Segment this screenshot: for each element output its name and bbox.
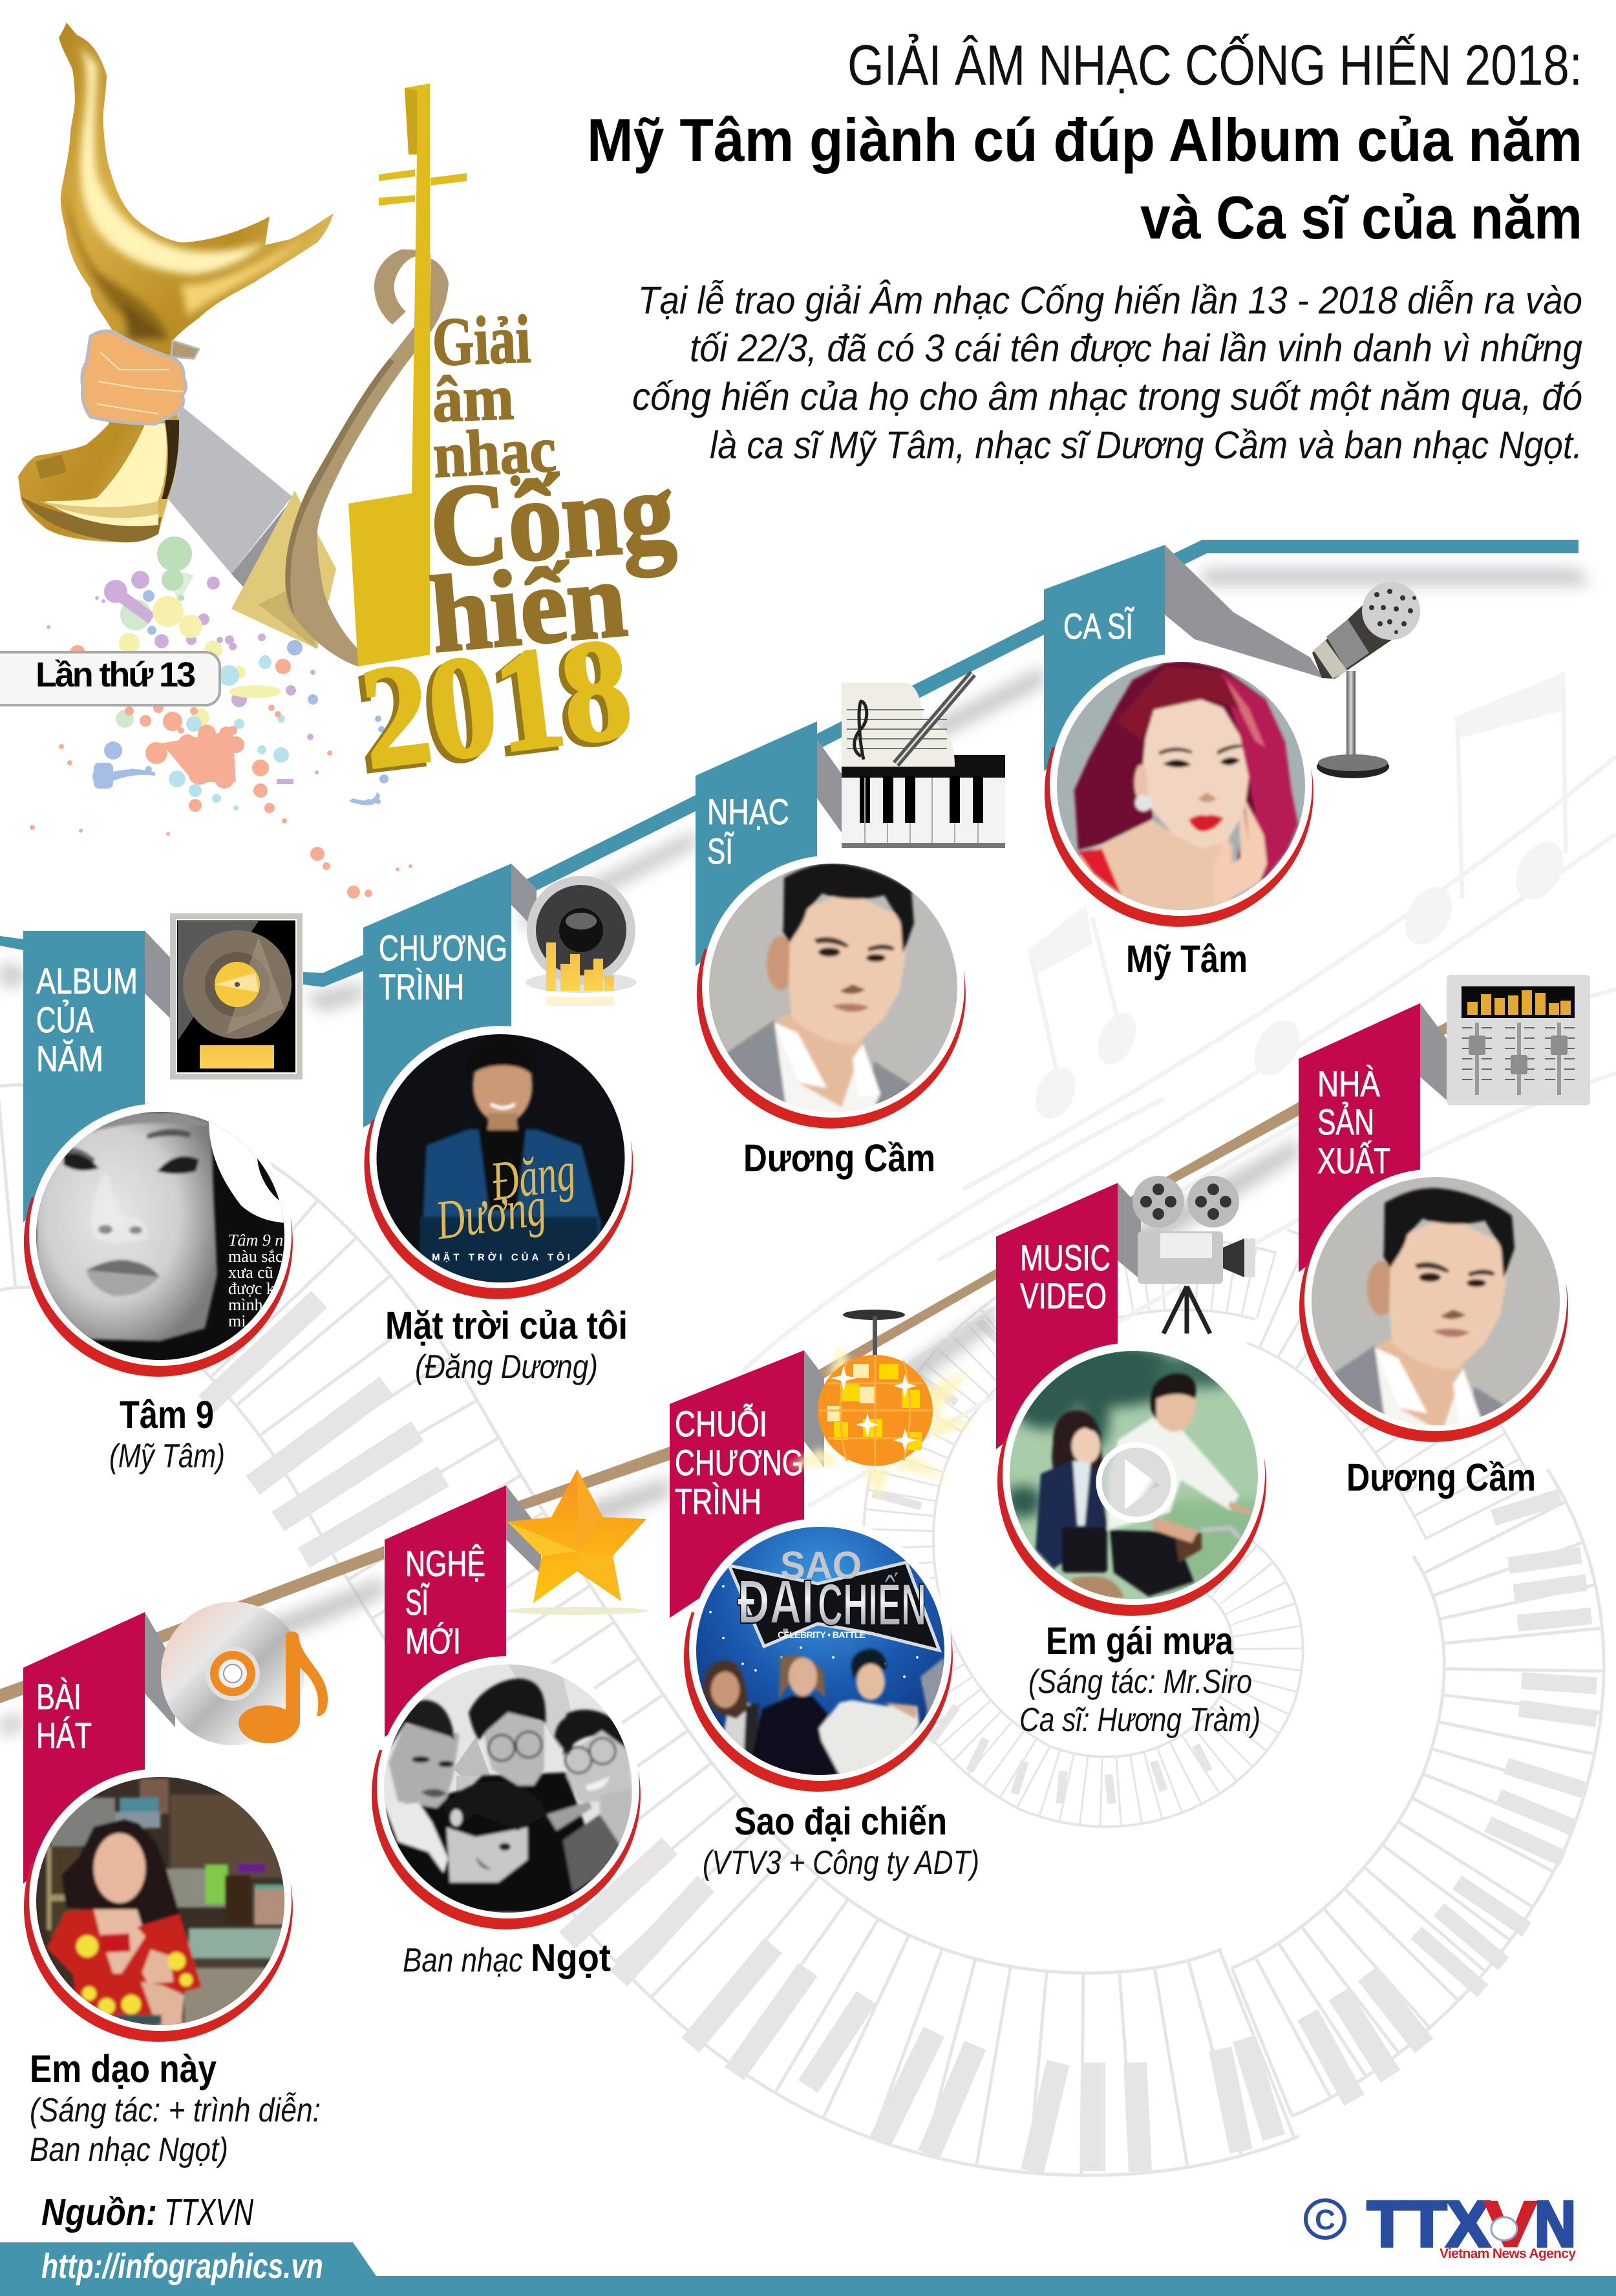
icon: golden bird trophy <box>18 23 334 542</box>
photo: Tâm 9 album: xưa cũ <box>228 1263 273 1282</box>
logo text: 2018 <box>353 606 639 800</box>
label: Mỹ Tâm: Mỹ Tâm <box>1126 937 1248 981</box>
photo: Sao đại chiến poster: CHIẾN <box>818 1571 926 1638</box>
logo text: âm <box>431 361 515 436</box>
flag: Nhà sản xuất <box>1299 1003 1420 1272</box>
photo: Mặt trời của tôi album <box>364 1026 633 1299</box>
flag: Chuỗi chương trình: TRÌNH <box>675 1481 761 1522</box>
label: Mặt trời của tôi: Mặt trời của tôi <box>385 1304 628 1347</box>
source <box>41 2191 253 2233</box>
flag: Nhạc sĩ: NHẠC <box>707 791 789 832</box>
intro paragraph: cống hiến của họ cho âm nhạc trong suốt một năm qua, đó <box>632 375 1582 418</box>
photo: Tâm 9 album: màu sắc <box>228 1247 282 1266</box>
flag: Music video: VIDEO <box>1020 1275 1107 1316</box>
label: Tâm 9 <box>109 1393 225 1475</box>
copyright symbol <box>1306 2200 1345 2238</box>
logo text <box>348 301 679 803</box>
photo: Tâm 9 album: Tâm 9 n <box>228 1231 283 1249</box>
photo: Sao đại chiến poster: SAO <box>780 1544 862 1587</box>
icon: instrument body <box>231 83 467 666</box>
icon: piano with sheet music and pen <box>842 674 1005 848</box>
flag: Bài hát <box>23 1612 145 1884</box>
tan ribbon line <box>0 1021 1448 1703</box>
flag: Nghệ sĩ mới: SĨ <box>405 1582 430 1622</box>
photo: Mặt trời của tôi album: Dương <box>432 1175 549 1251</box>
flag: Nhà sản xuất: NHÀ <box>1317 1063 1381 1104</box>
label: Dương Cầm: Dương Cầm <box>743 1136 935 1180</box>
label: Tâm 9: (Mỹ Tâm) <box>109 1438 225 1475</box>
photo: Tâm 9 album: được k <box>228 1279 275 1298</box>
logo: TTXVN: V <box>1484 2188 1537 2260</box>
ribbon shadows <box>0 569 1590 1736</box>
flag: Ca sĩ <box>1044 545 1165 771</box>
title <box>587 33 1582 251</box>
flag: Chương trình: TRÌNH <box>379 966 464 1007</box>
footer bar with URL: http://infographics.vn <box>41 2247 323 2286</box>
flag: Album của năm: CỦA <box>36 999 94 1040</box>
logo: TTXVN: N <box>1535 2188 1576 2260</box>
flag: Bài hát: BÀI <box>36 1676 81 1717</box>
icon: disco ball <box>785 1310 976 1500</box>
source: Nguồn: <box>41 2191 157 2233</box>
splash of paint behind logo <box>27 537 412 898</box>
photo: Mỹ Tâm <box>1045 654 1313 927</box>
photo: Sao đại chiến poster: ĐẠI <box>738 1568 814 1637</box>
badge: Lần thứ 13: Lần thứ 13 <box>36 655 196 694</box>
flag: Music video <box>996 1183 1118 1449</box>
icon: gold star <box>506 1469 648 1615</box>
background: faint music staff and notes <box>743 672 1616 1506</box>
photo: Dương Cầm, nhà sản xuất <box>1299 1169 1568 1442</box>
label: Sao đại chiến: Sao đại chiến <box>734 1800 947 1843</box>
label: Em gái mưa: (Sáng tác: Mr.Siro <box>1028 1663 1252 1701</box>
photo: Sao đại chiến poster <box>684 1518 953 1792</box>
photo: Dương Cầm, nhạc sĩ <box>697 855 966 1129</box>
icon: CD with music note <box>161 1602 328 1745</box>
flag: Chương trình: CHƯƠNG <box>379 928 507 968</box>
flag: Ca sĩ: CA SĨ <box>1063 606 1134 646</box>
photo: Em gái mưa with play button <box>997 1343 1270 1616</box>
flag: Chương trình <box>363 864 511 1127</box>
icon: microphone <box>1312 582 1420 778</box>
photo: Mặt trời của tôi album: MẶT TRỜI CỦA TÔI <box>432 1251 573 1263</box>
label: Em dạo này <box>30 2047 321 2169</box>
photo: Tâm 9 album <box>24 1103 293 1377</box>
photo: Tâm 9 album: mi <box>228 1312 246 1330</box>
label: Ban nhạc Ngọt <box>403 1936 611 1979</box>
flag: Chuỗi chương trình <box>670 1350 804 1618</box>
photo: Sao đại chiến poster: CELEBRITY • BATTLE <box>778 1630 866 1640</box>
label: Mặt trời của tôi: (Đăng Dương) <box>415 1348 598 1386</box>
logo: TTXVN: TTX <box>1367 2188 1490 2260</box>
logo: trophy and instrument <box>18 23 679 803</box>
logo text: hiến <box>426 538 631 675</box>
flag: Nghệ sĩ mới <box>385 1485 506 1737</box>
flag: Nghệ sĩ mới: MỚI <box>405 1621 461 1661</box>
flag: Album của năm <box>23 931 145 1222</box>
source: TTXVN <box>164 2191 253 2233</box>
label: Em dạo này: Em dạo này <box>30 2047 217 2090</box>
label: Em gái mưa: Em gái mưa <box>1046 1619 1234 1663</box>
label: Em dạo này: Ban nhạc Ngọt) <box>30 2131 228 2169</box>
label: Em dạo này: (Sáng tác: + trình diễn: <box>30 2092 321 2129</box>
flag: Nhà sản xuất: XUẤT <box>1317 1140 1390 1181</box>
logo: TTXVN <box>1367 2188 1576 2261</box>
logo text: Giải <box>431 301 532 380</box>
label: Tâm 9: Tâm 9 <box>120 1393 214 1436</box>
icon: gold record plaque <box>170 913 303 1079</box>
label: Sao đại chiến <box>703 1800 979 1882</box>
logo text: Cống <box>426 446 679 592</box>
badge: Lần thứ 13 <box>0 652 220 705</box>
label: Dương Cầm producer: Dương Cầm <box>1346 1456 1536 1499</box>
label: Ban nhạc Ngọt: Ngọt <box>531 1936 611 1979</box>
flag: Nhạc sĩ <box>696 721 817 966</box>
label: Em gái mưa <box>1019 1619 1260 1739</box>
flag: Chuỗi chương trình: CHUỖI <box>675 1403 767 1444</box>
flag: Album của năm: ALBUM <box>36 961 138 1001</box>
icon: speaker with equalizer <box>526 876 637 1006</box>
flag: Album của năm: NĂM <box>36 1038 103 1079</box>
teal ribbon line <box>0 540 1579 987</box>
logo text: nhạc <box>431 413 558 491</box>
flag: Music video: MUSIC <box>1020 1237 1111 1278</box>
copyright symbol: C <box>1315 2204 1335 2236</box>
flag: Bài hát: HÁT <box>36 1715 92 1756</box>
photo: Tâm 9 album: mình <box>228 1295 262 1314</box>
logo text: 2018 <box>348 610 634 803</box>
label: Em gái mưa: Ca sĩ: Hương Tràm) <box>1019 1701 1260 1739</box>
flag: Nhà sản xuất: SẢN <box>1317 1101 1374 1142</box>
photo: Mặt trời của tôi album: Đăng <box>487 1140 579 1213</box>
flag: Chuỗi chương trình: CHƯƠNG <box>675 1442 803 1483</box>
photo: Em dạo này MV still <box>24 1769 293 2042</box>
background: piano key spiral <box>0 1186 1597 2171</box>
icon: film camera <box>1132 1176 1255 1334</box>
flag: Nhạc sĩ: SĨ <box>707 831 734 871</box>
intro paragraph <box>632 279 1582 467</box>
icon: audio mixer <box>1447 975 1590 1105</box>
label: Mặt trời của tôi <box>385 1304 628 1386</box>
photo: ban nhạc Ngọt <box>372 1656 641 1929</box>
label: Sao đại chiến: (VTV3 + Công ty ADT) <box>703 1844 979 1882</box>
icon: hand holding trophy <box>82 331 199 424</box>
gray band behind hand <box>168 404 292 590</box>
footer bar with URL <box>0 2242 1616 2296</box>
gray ribbon folds <box>145 545 1447 1727</box>
flag: Nghệ sĩ mới: NGHỆ <box>405 1543 485 1584</box>
logo: TTXVN: Vietnam News Agency <box>1440 2246 1576 2261</box>
label: Ban nhạc Ngọt: Ban nhạc <box>403 1942 523 1979</box>
